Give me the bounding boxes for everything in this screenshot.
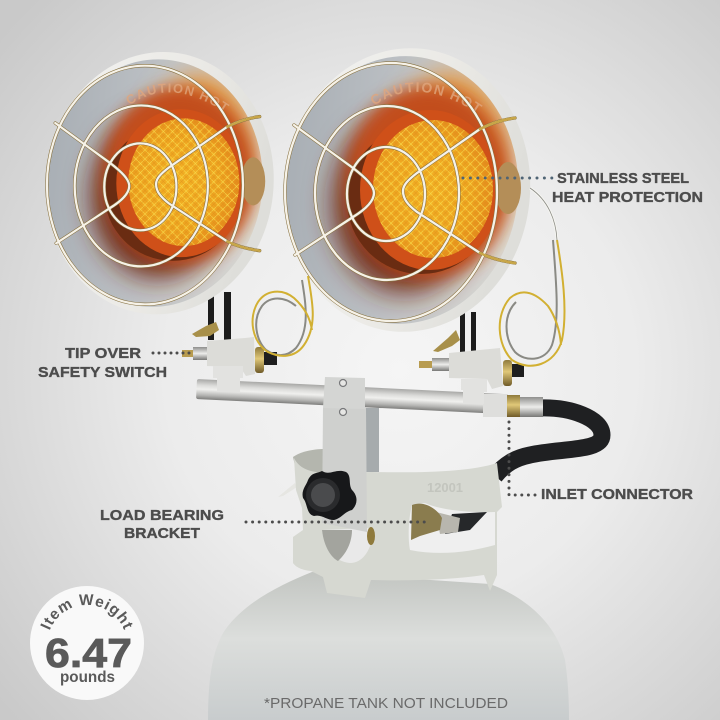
right orange halo	[394, 72, 510, 248]
left connector	[255, 347, 264, 373]
left safety switch	[182, 322, 277, 392]
right wing nut	[433, 330, 460, 352]
right side bracket	[495, 162, 521, 214]
left cage	[47, 66, 260, 304]
left nozzle	[193, 347, 207, 360]
valve black body	[445, 512, 487, 534]
collar back band	[293, 449, 325, 478]
callout: stainless steel heat protection	[463, 171, 703, 206]
left wire loop	[253, 276, 313, 356]
left black plug	[264, 352, 277, 365]
item weight badge	[30, 586, 144, 700]
propane tank	[208, 572, 569, 720]
left heater stem	[208, 292, 231, 340]
left bowl	[35, 49, 275, 318]
inlet label: INLET CONNECTOR	[541, 487, 694, 503]
badge number: 6.47	[45, 630, 132, 676]
opening shadow	[322, 530, 352, 561]
left heater head	[45, 52, 274, 314]
right bowl	[273, 45, 531, 335]
bracket side	[366, 408, 379, 472]
load bearing bracket	[322, 408, 379, 532]
tip over leader	[153, 352, 190, 354]
badge unit: pounds	[60, 669, 115, 686]
lower round opening	[322, 528, 373, 563]
left side bracket	[241, 157, 265, 205]
inlet leader	[509, 422, 536, 495]
right bowl glow	[333, 72, 510, 293]
left caution text: CAUTION HOT	[126, 84, 230, 110]
right dark glow	[333, 117, 477, 293]
left wing nut	[192, 322, 219, 337]
callout: load bearing bracket	[100, 508, 428, 542]
tip over label: SAFETY SWITCH	[38, 365, 167, 381]
right glow	[346, 86, 510, 278]
manifold pipe	[196, 379, 506, 414]
right cage	[285, 63, 515, 321]
tank valve	[411, 504, 487, 540]
right wire loop	[500, 188, 565, 366]
right nozzle tip	[419, 361, 432, 368]
load bearing leader	[246, 520, 428, 524]
brass nut	[507, 395, 520, 417]
right mesh base	[373, 120, 493, 258]
badge circle	[30, 586, 144, 700]
knob ring	[306, 478, 340, 512]
left orange halo	[148, 74, 255, 237]
right switch clamp	[461, 379, 487, 404]
stainless leader	[463, 176, 552, 180]
load bearing label: LOAD BEARING	[100, 508, 224, 524]
hose	[495, 408, 602, 476]
callout: tip over safety switch	[38, 346, 190, 381]
stainless label: HEAT PROTECTION	[552, 190, 703, 206]
valve opening	[409, 503, 495, 553]
knob star	[303, 471, 356, 520]
right shell	[270, 36, 544, 344]
right nozzle	[432, 358, 449, 371]
left burner shadow	[104, 124, 241, 261]
left switch body	[207, 337, 255, 376]
right connector	[503, 360, 512, 386]
stainless label: STAINLESS STEEL	[557, 171, 689, 187]
knob cap	[311, 483, 335, 507]
right safety switch	[419, 330, 524, 404]
collar tab	[278, 483, 297, 497]
left mesh base	[128, 118, 239, 246]
right burner shadow	[347, 126, 495, 274]
left burner ring	[116, 109, 246, 257]
left dark glow	[91, 116, 225, 278]
left shell	[33, 41, 287, 326]
right black plug	[512, 364, 524, 377]
right heater stem	[460, 312, 476, 352]
bracket top plate	[323, 377, 365, 409]
left switch clamp	[213, 366, 243, 392]
brass nut under bracket	[367, 527, 375, 545]
tank disclaimer: *PROPANE TANK NOT INCLUDED	[264, 695, 508, 712]
valve brass	[411, 504, 442, 540]
right caution text: CAUTION HOT	[371, 82, 482, 111]
right switch body	[449, 348, 503, 389]
tank collar	[278, 449, 502, 598]
right heater head	[283, 48, 530, 332]
callout: inlet connector	[509, 422, 694, 503]
left mesh	[128, 118, 239, 246]
band stamped text: 12001	[427, 480, 463, 495]
badge arc text: Item Weight	[40, 594, 132, 630]
collar body	[293, 458, 502, 598]
left bowl glow	[91, 74, 255, 278]
left nozzle tip	[182, 350, 193, 357]
left glow	[103, 87, 255, 265]
bracket screws	[340, 380, 346, 416]
valve silver	[436, 512, 460, 534]
right burner ring	[360, 110, 500, 270]
tip over label: TIP OVER	[65, 346, 142, 362]
pipe end fitting	[483, 394, 508, 417]
hose ferrule	[520, 397, 543, 417]
load bearing label: BRACKET	[124, 526, 200, 542]
bracket plate	[322, 408, 367, 532]
collar knob	[303, 471, 356, 520]
right mesh	[373, 120, 493, 258]
